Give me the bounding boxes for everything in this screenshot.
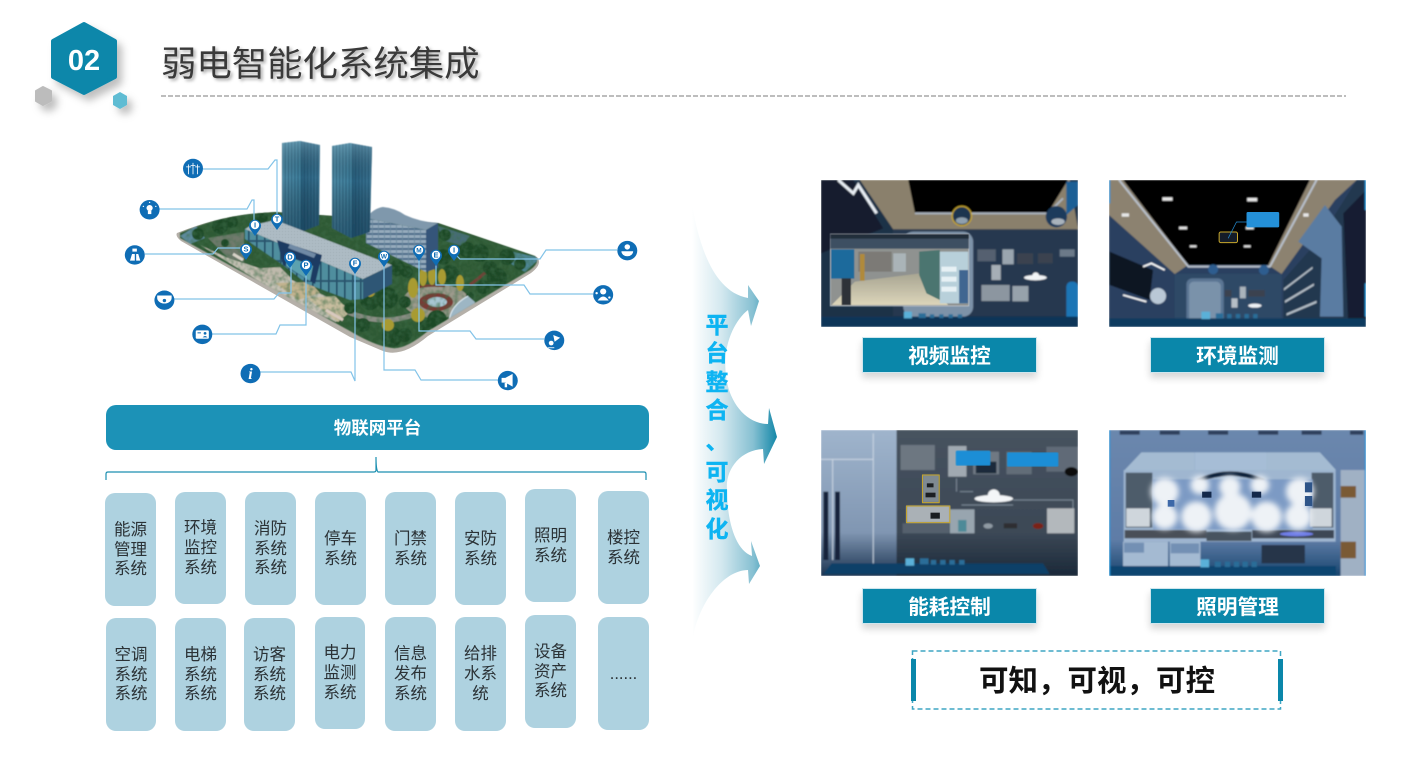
system box <box>598 491 649 604</box>
smart park building illustration with callout icons <box>124 140 638 390</box>
system box: 系统 <box>394 685 427 703</box>
system box <box>244 618 295 731</box>
plaza <box>200 245 350 322</box>
system box: row 1: 管理 <box>114 541 147 559</box>
system box: 系统 <box>184 559 217 577</box>
system box <box>385 492 436 605</box>
tower 2 <box>332 143 372 238</box>
icon: information <box>241 364 261 383</box>
system box: row 2: 系统 <box>114 666 148 684</box>
system box: 环境 <box>184 519 217 537</box>
map pins: I <box>453 246 455 255</box>
system box: 电梯 <box>184 646 217 664</box>
vertical heading: platform integration and visualization: 平 <box>706 312 728 338</box>
system box: 给排 <box>464 645 497 663</box>
system box: 系统 <box>253 666 286 684</box>
system box: 设备 <box>534 643 567 661</box>
vertical heading: platform integration and visualization <box>706 312 728 542</box>
label: video surveillance <box>862 337 1037 373</box>
section badge: hexagons with number 02: 02 <box>68 45 100 77</box>
system box: 系统 <box>184 685 217 703</box>
yellow trees <box>365 267 464 331</box>
map pins: I <box>254 221 256 230</box>
section badge: hexagons with number 02 <box>35 22 136 118</box>
map pins: S <box>243 245 249 254</box>
callout: knowable, visible, controllable: 可知，可视，可控 <box>979 665 1215 698</box>
system box: 发布 <box>394 665 427 683</box>
label: lighting management: 照明管理 <box>1196 596 1279 618</box>
icon: light bulb <box>140 200 160 219</box>
bracket connector <box>105 457 647 480</box>
vertical heading: platform integration and visualization: 可 <box>706 459 728 485</box>
platform bar: 物联网平台 <box>334 418 421 438</box>
system box <box>455 492 506 605</box>
system box: row 2: 空调 <box>114 646 148 664</box>
icon: fire safety person <box>125 245 145 265</box>
system box <box>385 617 436 731</box>
system box <box>245 492 296 605</box>
system box: 楼控 <box>607 529 640 547</box>
glass pavilion <box>450 296 476 318</box>
icon: dome camera <box>617 241 637 260</box>
label: environment monitoring <box>1150 337 1325 373</box>
platform slab <box>176 212 539 353</box>
system box: 监测 <box>324 664 356 682</box>
icon: access card <box>192 325 212 344</box>
map pins: D <box>287 253 293 262</box>
system box: 统 <box>472 685 489 703</box>
callout: knowable, visible, controllable <box>911 650 1283 710</box>
system box: row 2: 系统 <box>114 685 148 703</box>
system box: 系统 <box>394 550 427 568</box>
platform bar <box>106 405 649 450</box>
system box: row 1: 系统 <box>114 560 147 578</box>
system box: row 2 <box>106 618 156 731</box>
system box: 系统 <box>464 550 497 568</box>
system box: 资产 <box>534 663 567 681</box>
system box: 系统 <box>253 685 286 703</box>
vertical heading: platform integration and visualization: 视 <box>706 487 728 513</box>
system box <box>525 615 576 728</box>
main building <box>245 229 363 300</box>
map pins: P <box>303 261 309 270</box>
system box: 系统 <box>534 682 567 700</box>
leaf texture <box>180 213 537 347</box>
system box: row 1 <box>105 493 156 606</box>
road planter <box>326 310 343 320</box>
fountain plaza <box>403 284 469 318</box>
label: environment monitoring: 环境监测 <box>1196 344 1279 368</box>
map pins: F <box>353 259 358 268</box>
system box <box>455 617 506 731</box>
system box: 停车 <box>324 530 357 548</box>
system box: 门禁 <box>394 530 427 548</box>
vertical heading: platform integration and visualization: 合 <box>706 397 728 423</box>
icon: megaphone <box>498 371 518 390</box>
map pins: T <box>275 215 280 224</box>
vertical heading: platform integration and visualization: 台 <box>706 340 728 366</box>
system box: 消防 <box>254 520 287 538</box>
system box: 系统 <box>184 666 217 684</box>
system box: 安防 <box>464 530 497 548</box>
screenshot: energy control <box>821 430 1078 576</box>
icon: water valve <box>544 331 564 350</box>
system box: row 1: 能源 <box>114 521 147 539</box>
system box <box>598 617 649 730</box>
map pins: E <box>433 251 439 260</box>
system box: 系统 <box>607 548 640 566</box>
vertical heading: platform integration and visualization: 、 <box>706 428 728 454</box>
label: energy control: 能耗控制 <box>908 596 991 618</box>
tower 1 <box>282 141 320 232</box>
system box <box>315 617 365 729</box>
icon: power tower <box>183 159 203 178</box>
system box: 系统 <box>324 550 357 568</box>
hotel building <box>366 218 426 272</box>
screenshot: lighting management <box>1109 430 1366 576</box>
system box <box>175 492 226 604</box>
map pins: W <box>381 254 388 260</box>
icon: visitor <box>593 285 613 305</box>
label: lighting management <box>1150 588 1325 624</box>
label: energy control <box>862 588 1037 624</box>
trees <box>192 211 526 347</box>
vertical heading: platform integration and visualization: 化 <box>706 516 728 542</box>
system box: 水系 <box>464 665 497 683</box>
label: video surveillance: 视频监控 <box>908 344 991 368</box>
system box: 信息 <box>394 645 427 663</box>
system box: 系统 <box>324 684 356 702</box>
screenshot: environment monitoring <box>1109 180 1366 327</box>
system box: 系统 <box>254 559 287 577</box>
title: 弱电智能化系统集成 <box>161 44 480 84</box>
system box: 监控 <box>184 539 217 557</box>
system box: 照明 <box>534 527 567 545</box>
system box: 系统 <box>254 540 287 558</box>
map pins <box>240 214 460 276</box>
icon: security camera <box>154 290 174 310</box>
vertical heading: platform integration and visualization: 整 <box>706 369 728 395</box>
screenshot: video surveillance <box>821 180 1078 327</box>
curved road <box>348 312 420 320</box>
system box <box>525 489 576 602</box>
system box: 电力 <box>324 644 356 662</box>
system box: ...... <box>610 665 637 683</box>
system box <box>175 618 226 731</box>
title underline <box>161 95 1346 96</box>
callout lines <box>145 160 617 381</box>
icon: information: i <box>248 366 253 383</box>
ground <box>180 211 538 349</box>
map pins: M <box>416 248 422 254</box>
system box <box>315 492 366 605</box>
system box: 访客 <box>253 646 286 664</box>
system box: 系统 <box>534 546 567 564</box>
arrow: platform integration flow <box>698 232 777 618</box>
